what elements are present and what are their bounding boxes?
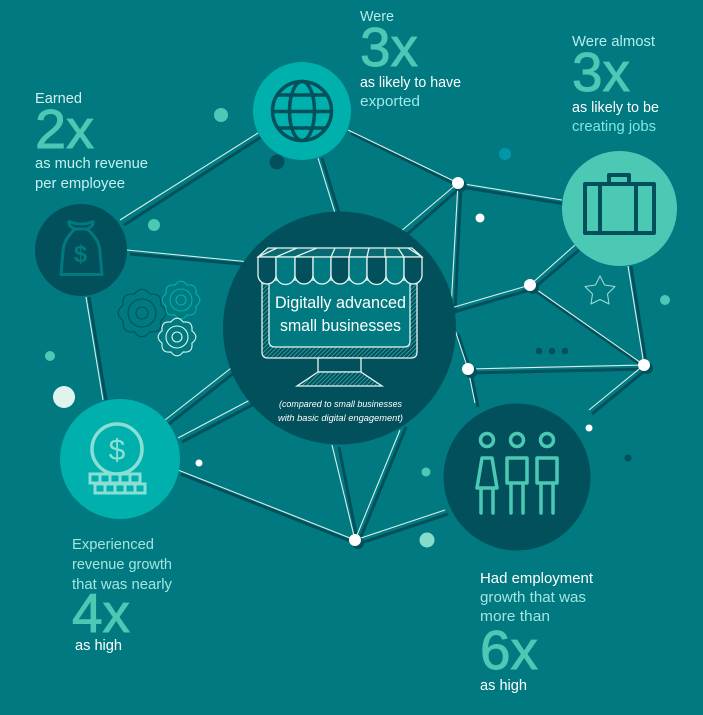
text: exported stat: Were bbox=[360, 8, 394, 25]
text: revenue growth stat bbox=[72, 536, 172, 654]
text: revenue growth stat: revenue growth bbox=[72, 556, 172, 573]
central note: (compared to small businesses bbox=[279, 399, 402, 410]
central title bbox=[275, 294, 406, 335]
text: revenue per employee stat: per employee bbox=[35, 175, 125, 192]
text: revenue growth stat: 4x bbox=[72, 582, 130, 644]
icon circle: globe bbox=[253, 62, 351, 160]
text: jobs stat: as likely to be bbox=[572, 99, 659, 116]
network light lines bbox=[86, 130, 644, 540]
text: revenue growth stat: that was nearly bbox=[72, 576, 172, 593]
text: employment growth stat: Had employment bbox=[480, 570, 594, 587]
text: exported stat bbox=[360, 8, 461, 110]
central note: with basic digital engagement) bbox=[278, 413, 403, 424]
text: revenue per employee stat: Earned bbox=[35, 90, 82, 107]
text: revenue growth stat: Experienced bbox=[72, 536, 154, 553]
text: jobs stat: creating jobs bbox=[572, 118, 656, 135]
text: jobs stat bbox=[572, 33, 659, 135]
central circle: digitally advanced small businesses bbox=[223, 212, 456, 444]
icon: star bbox=[585, 276, 615, 304]
icon circle: coins bbox=[60, 399, 180, 519]
text: jobs stat: Were almost bbox=[572, 33, 656, 50]
network nodes bbox=[349, 177, 653, 549]
text: employment growth stat: growth that was bbox=[480, 589, 586, 606]
text: revenue per employee stat: 2x bbox=[35, 98, 94, 160]
text: employment growth stat bbox=[480, 570, 594, 694]
text: employment growth stat: more than bbox=[480, 608, 550, 625]
icon: awning bbox=[258, 248, 422, 284]
text: jobs stat: 3x bbox=[572, 41, 630, 103]
text: revenue per employee stat bbox=[35, 90, 148, 192]
network shadow lines bbox=[89, 133, 647, 544]
icon circle: money bag bbox=[35, 204, 127, 296]
icon: gears bbox=[118, 281, 200, 356]
text: employment growth stat: 6x bbox=[480, 619, 538, 681]
icon circle: briefcase bbox=[562, 151, 677, 266]
decorative dots bbox=[45, 108, 670, 548]
text: revenue per employee stat: as much revenue bbox=[35, 155, 148, 172]
icon circle: coins: $ bbox=[109, 434, 126, 467]
text: exported stat: exported bbox=[360, 93, 420, 110]
text: employment growth stat: as high bbox=[480, 677, 527, 694]
text: exported stat: as likely to have bbox=[360, 74, 461, 91]
text: revenue growth stat: as high bbox=[75, 637, 122, 654]
icon circle: money bag: $ bbox=[74, 241, 88, 268]
icon circle: people bbox=[444, 404, 590, 550]
central note bbox=[278, 399, 403, 424]
text: exported stat: 3x bbox=[360, 16, 418, 78]
central title: Digitally advanced bbox=[275, 294, 406, 312]
central title: small businesses bbox=[280, 317, 401, 335]
icon: monitor bbox=[262, 275, 417, 386]
